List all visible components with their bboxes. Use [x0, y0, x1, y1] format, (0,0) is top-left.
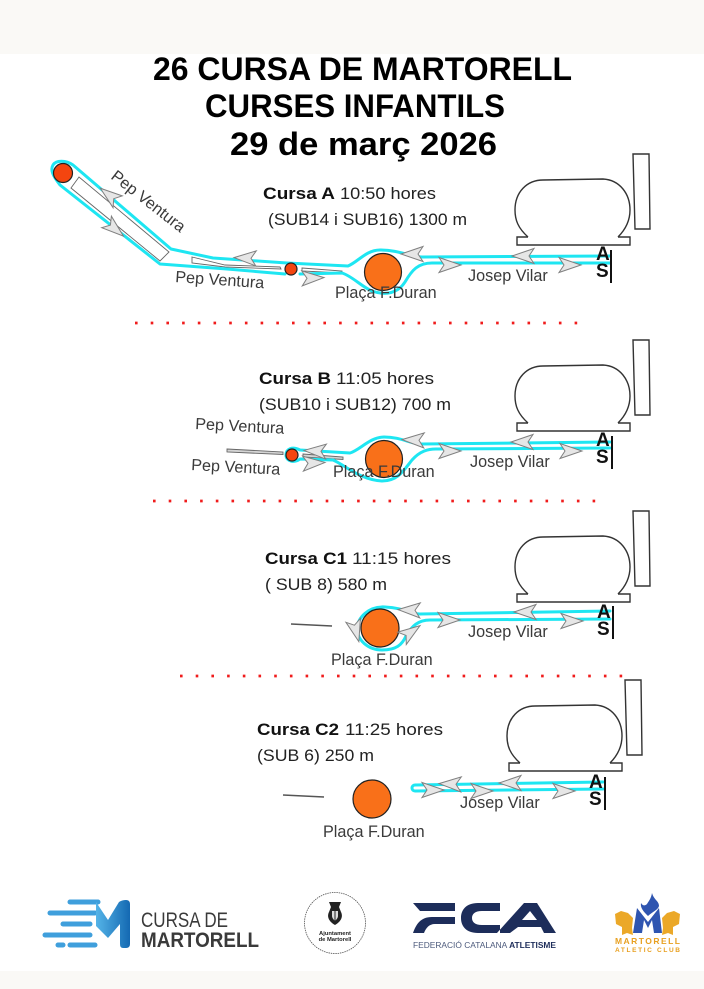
road bars B: [227, 449, 343, 460]
start finish C1: S: [597, 619, 610, 640]
stadium A: [515, 154, 650, 245]
caption: de Martorell: [319, 937, 352, 943]
labels A: Plaça F.Duran: [335, 284, 437, 302]
labels A: [108, 167, 548, 302]
divider 1: [135, 322, 580, 324]
heading: cursa B: 11:05 hores: [336, 369, 434, 388]
caption: ATLETIC CLUB: [615, 947, 680, 954]
labels B: Plaça F.Duran: [333, 463, 435, 481]
icon: lions: [615, 911, 680, 935]
labels C2: Plaça F.Duran: [323, 823, 425, 841]
labels C1: Josep Vilar: [468, 623, 548, 641]
title: [153, 51, 572, 162]
title: 29 de març 2026: [230, 126, 497, 162]
heading: cursa B: Cursa B: [259, 369, 331, 388]
circle: Plaça F.Duran C2: [353, 780, 391, 818]
stadium B: [515, 340, 650, 431]
route line B: [286, 437, 610, 481]
heading: cursa B: (SUB10 i SUB12) 700 m: [259, 395, 451, 414]
logo: FCA: [413, 903, 557, 950]
labels C1: [331, 623, 548, 669]
icon: M: [633, 908, 662, 933]
logo: Cursa de Martorell: [45, 900, 259, 952]
heading: cursa A: 10:50 hores: [340, 184, 436, 203]
start point A: [54, 164, 72, 182]
circle: Plaça F.Duran B: [366, 440, 402, 478]
caption: FEDERACIÓ CATALANA ATLETISME: [413, 941, 557, 950]
icon: speed lines and M: [45, 900, 130, 948]
start finish B: [596, 430, 612, 469]
route line C2: [412, 782, 603, 791]
labels B: [191, 415, 550, 481]
caption: [615, 936, 680, 954]
icon: shield: [328, 902, 342, 925]
turning point B: [286, 449, 298, 461]
heading: cursa C2: (SUB 6) 250 m: [257, 746, 374, 765]
labels B: Pep Ventura: [195, 415, 285, 438]
caption: MARTORELL: [615, 936, 680, 946]
heading: cursa A: (SUB14 i SUB16) 1300 m: [268, 210, 467, 229]
labels C2: [323, 794, 540, 841]
heading: cursa C1: Cursa C1: [265, 549, 347, 568]
arrows C1: [346, 602, 583, 644]
heading: cursa A: [263, 184, 467, 229]
turning point A: [285, 263, 297, 275]
letters FCA: [413, 903, 556, 933]
labels A: Pep Ventura: [108, 167, 189, 236]
circle: Plaça F.Duran C1: [361, 609, 399, 647]
wordmark: MARTORELL: [141, 929, 259, 952]
road bars A: [71, 177, 342, 273]
arrows A: [96, 182, 581, 286]
stadium C1: [515, 511, 650, 602]
labels B: Pep Ventura: [191, 456, 281, 479]
panel: cursa C1: [265, 511, 650, 669]
labels B: Josep Vilar: [470, 453, 550, 471]
heading: cursa B: [259, 369, 451, 414]
panel: cursa C2: [257, 680, 642, 841]
circle: Plaça F.Duran A: [364, 254, 402, 290]
route line C1: [357, 607, 610, 650]
heading: cursa A: Cursa A: [263, 184, 335, 203]
panel: cursa A: [52, 154, 650, 302]
heading: cursa C1: 11:15 hores: [352, 549, 451, 568]
icon: flame: [641, 893, 659, 916]
start finish C1: [597, 602, 613, 640]
heading: cursa C2: 11:25 hores: [345, 720, 443, 739]
labels A: Josep Vilar: [468, 267, 548, 285]
street stub C2: [283, 795, 324, 797]
start finish A: [596, 244, 611, 283]
wordmark: CURSA DE: [141, 909, 228, 932]
arrows C2: [422, 776, 575, 798]
street stub C1: [291, 624, 332, 626]
start finish A: A: [596, 244, 610, 265]
start finish B: A: [596, 430, 610, 451]
caption: Ajuntament: [319, 931, 351, 937]
stadium C2: [507, 680, 642, 771]
heading: cursa C1: [265, 549, 451, 594]
panel: cursa B: [191, 340, 650, 481]
route line A: [52, 161, 610, 293]
divider 3: [180, 675, 625, 677]
start finish C1: A: [597, 602, 611, 623]
title: 26 CURSA DE MARTORELL: [153, 51, 572, 87]
arrows B: [303, 432, 582, 471]
labels C1: Plaça F.Duran: [331, 651, 433, 669]
caption: [319, 931, 352, 943]
top band: [0, 0, 704, 54]
labels A: Pep Ventura: [175, 268, 265, 292]
start finish C2: [589, 772, 605, 810]
start finish A: S: [596, 261, 609, 282]
divider 2: [153, 500, 598, 502]
logo: Martorell Atletic Club: [615, 893, 680, 954]
heading: cursa C1: ( SUB 8) 580 m: [265, 575, 387, 594]
labels C2: Josep Vilar: [460, 794, 540, 812]
start finish C2: A: [589, 772, 603, 793]
bottom band: [0, 971, 704, 989]
start finish C2: S: [589, 789, 602, 810]
title: CURSES INFANTILS: [205, 88, 505, 124]
heading: cursa C2: [257, 720, 443, 765]
heading: cursa C2: Cursa C2: [257, 720, 339, 739]
start finish B: S: [596, 447, 609, 468]
wordmark: [141, 909, 259, 952]
logo: Ajuntament de Martorell: [304, 892, 366, 954]
